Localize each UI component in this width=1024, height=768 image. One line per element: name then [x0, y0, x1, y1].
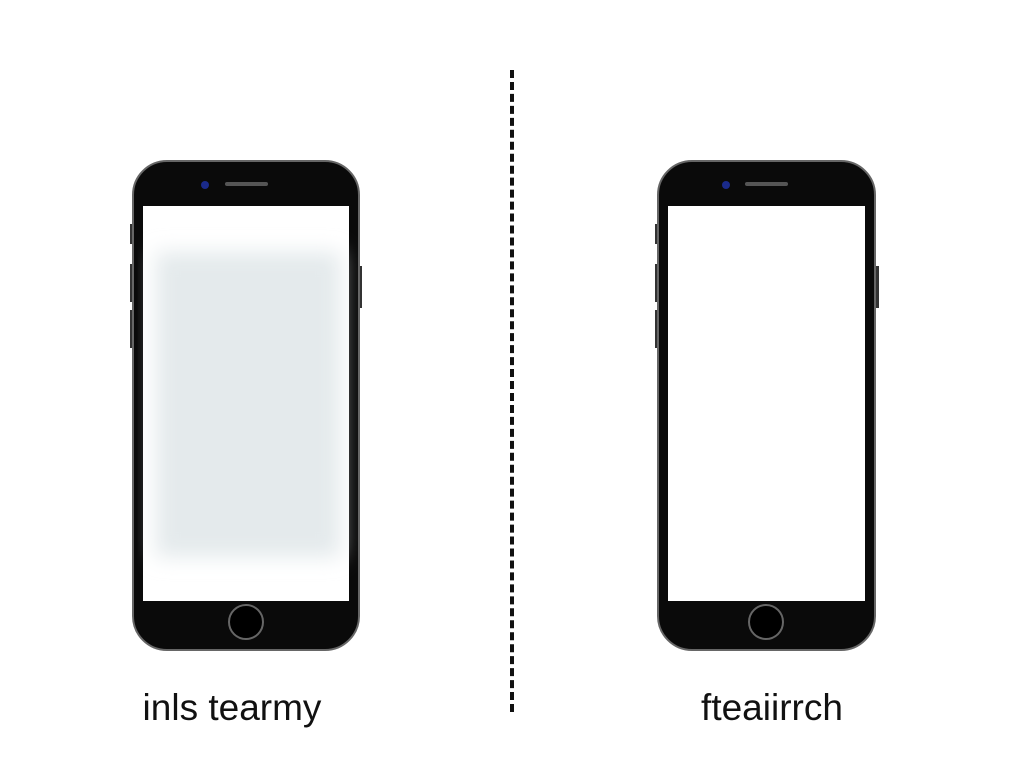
- label: left: inls tearmy: [143, 687, 321, 728]
- label: right: fteaiirrch: [701, 687, 843, 728]
- phone: left blurred: [130, 160, 362, 651]
- phone: right clear: [655, 160, 879, 651]
- divider: dashed line: [510, 70, 514, 712]
